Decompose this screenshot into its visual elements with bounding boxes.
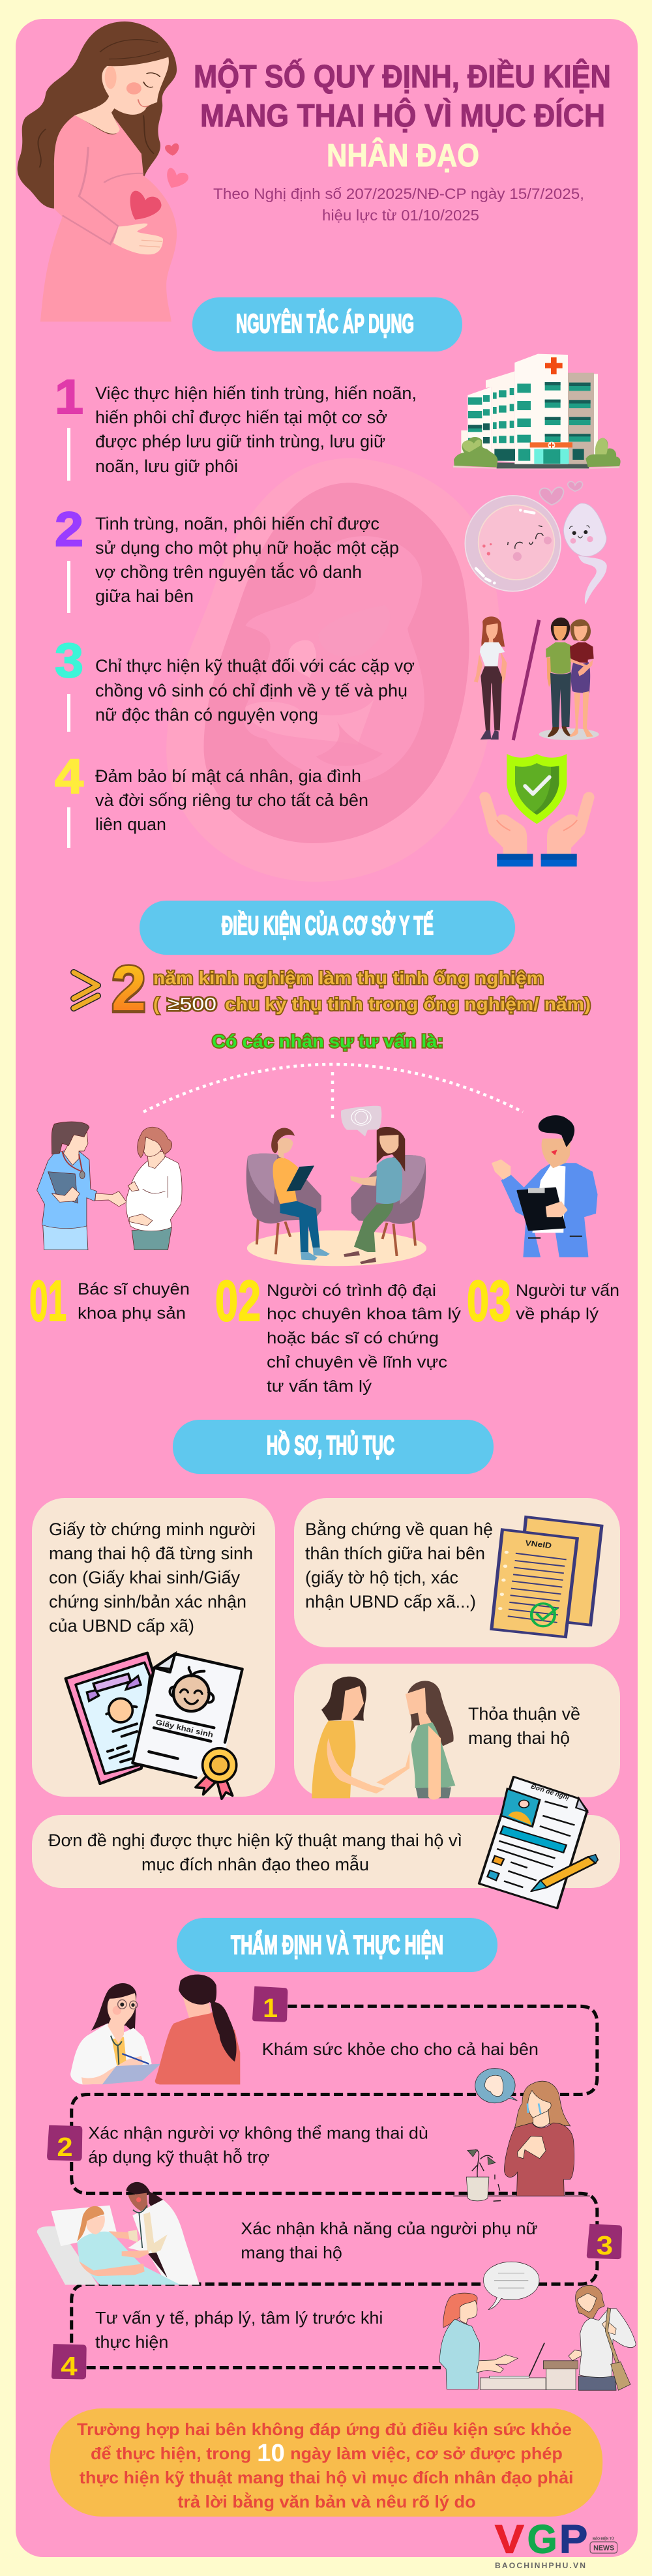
experience requirement: năm kinh nghiệm làm thụ tinh ống nghiệm: [153, 968, 544, 988]
principle 3: Chỉ thực hiện kỹ thuật đối với các cặp vợ: [95, 656, 415, 676]
callout: refusal within 10 working days: 10: [257, 2439, 285, 2467]
card: agreement: mang thai hộ: [468, 1728, 570, 1748]
principle 2: giữa hai bên: [95, 586, 194, 606]
card: application form: Đơn đề nghị được thực hiện kỹ thuật mang thai hộ vì: [48, 1831, 462, 1850]
step 4: thực hiện: [95, 2332, 168, 2352]
logo: VGP News: BAOCHINHPHU.VN: [495, 2561, 585, 2570]
callout: refusal within 10 working days: ngày làm việc, cơ sở được phép: [290, 2445, 563, 2463]
illustration: VNeID document: [492, 1517, 602, 1637]
principle 1: hiến phôi chỉ được hiến tại một cơ sở: [95, 408, 387, 427]
step 4: Tư vấn y tế, pháp lý, tâm lý trước khi: [95, 2308, 383, 2328]
principle 1: [55, 370, 417, 481]
step 1: Khám sức khỏe cho cho cả hai bên: [262, 2039, 539, 2059]
card: agreement: [294, 1664, 620, 1797]
callout: refusal within 10 working days: thực hiện kỹ thuật mang thai hộ vì mục đích nhân đạo phải: [80, 2469, 574, 2487]
icon: greater-or-equal sign: [74, 972, 98, 1008]
personnel 02: chỉ chuyên về lĩnh vực: [267, 1353, 447, 1371]
icon: large heart: [167, 168, 188, 188]
illustration: VNeID document: VNeID: [524, 1538, 552, 1550]
principle 4: [55, 749, 368, 848]
personnel 01: [29, 1268, 190, 1333]
personnel 03: [467, 1268, 619, 1333]
step 1: [252, 1986, 539, 2059]
principle 3: 3: [55, 633, 83, 687]
card: agreement: Thỏa thuận về: [468, 1704, 580, 1724]
logo: VGP News: [495, 2517, 617, 2570]
illustration: shield with hands: [479, 754, 595, 867]
principle 1: được phép lưu giữ tinh trùng, lưu giữ: [95, 432, 385, 451]
step 3: [241, 2219, 622, 2262]
subtitle: Theo Nghị định số 207/2025/NĐ-CP ngày 15/7/2025,: [213, 185, 584, 202]
logo: VGP News: V: [495, 2517, 524, 2561]
heading pill: dossier: [173, 1420, 494, 1474]
principle 1: 1: [55, 370, 83, 424]
logo: VGP News: G: [527, 2517, 557, 2561]
personnel 02: học chuyên khoa tâm lý: [267, 1305, 462, 1323]
card: proof of prior birth: con (Giấy khai sinh/Giấy: [49, 1568, 241, 1587]
illustration: pregnant mother: [18, 22, 188, 322]
experience requirement: ≥500: [168, 994, 216, 1014]
card: kinship proof: Bằng chứng về quan hệ: [305, 1520, 493, 1539]
step 2: [47, 2123, 428, 2167]
illustration: counselling session: [246, 1106, 426, 1266]
principle 3: [55, 633, 415, 732]
card: kinship proof: (giấy tờ hộ tịch, xác: [305, 1568, 458, 1587]
personnel 03: Người tư vấn: [516, 1281, 619, 1300]
illustration: hospital: [453, 354, 621, 469]
heading pill: appraisal: THẨM ĐỊNH VÀ THỰC HIỆN: [231, 1929, 443, 1960]
step 4: 4: [61, 2351, 78, 2381]
step 3: 3: [597, 2230, 613, 2260]
personnel 01: khoa phụ sản: [78, 1304, 186, 1323]
heading pill: facility conditions: ĐIỀU KIỆN CỦA CƠ SỞ Y TẾ: [222, 910, 434, 940]
principle 2: 2: [55, 502, 83, 556]
principle 2: Tinh trùng, noãn, phôi hiến chỉ được: [95, 514, 379, 533]
watermark: fetus in womb: [166, 458, 501, 882]
subtitle: [213, 185, 584, 224]
card: proof of prior birth: [32, 1498, 275, 1797]
heading pill: appraisal: [177, 1918, 497, 1972]
icon: small heart: [165, 143, 179, 156]
callout: refusal within 10 working days: trả lời bằng văn bản và nêu rõ lý do: [177, 2492, 476, 2511]
card: proof of prior birth: Giấy tờ chứng minh người: [49, 1520, 256, 1539]
dashed process path: [72, 2006, 597, 2368]
principle 4: 4: [55, 749, 83, 803]
form label: Đơn đề nghị: [529, 1782, 571, 1801]
heading pill: facility conditions: [140, 901, 515, 955]
illustration: doctor examining patient: [70, 1975, 240, 2084]
personnel 02: hoặc bác sĩ có chứng: [267, 1329, 439, 1347]
principle 2: [55, 502, 399, 613]
logo: VGP News: P: [559, 2517, 587, 2561]
illustration: doctor with patient in bed: [37, 2182, 200, 2285]
heading pill: dossier: HỒ SƠ, THỦ TỤC: [267, 1430, 394, 1460]
step 4: [52, 2308, 383, 2381]
personnel heading: Có các nhân sự tư vấn là:: [212, 1031, 443, 1051]
card: proof of prior birth: của UBND cấp xã): [49, 1616, 194, 1636]
principle 4: và đời sống riêng tư cho tất cả bên: [95, 790, 368, 810]
principle 3: chồng vô sinh có chỉ định về y tế và phụ: [95, 681, 408, 700]
principle 1: noãn, lưu giữ phôi: [95, 457, 238, 476]
dotted connector: [143, 1064, 523, 1121]
personnel 03: về pháp lý: [516, 1305, 599, 1323]
principle 1: Việc thực hiện hiến tinh trùng, hiến noãn,: [95, 383, 417, 403]
illustration: egg and sperm: [465, 481, 607, 605]
step 3: Xác nhận khả năng của người phụ nữ: [241, 2219, 538, 2238]
step 2: Xác nhận người vợ không thể mang thai dù: [88, 2123, 428, 2143]
divider slash: [512, 620, 541, 741]
logo: VGP News: BÁO ĐIỆN TỬ: [593, 2536, 615, 2541]
personnel 01: 01: [29, 1268, 67, 1333]
personnel 02: tư vấn tâm lý: [267, 1377, 372, 1396]
principle 2: vợ chồng trên nguyên tắc vô danh: [95, 562, 362, 582]
title: NHÂN ĐẠO: [327, 138, 479, 173]
card: kinship proof: thân thích giữa hai bên: [305, 1544, 485, 1563]
illustration: doctor and pregnant patient: [37, 1122, 182, 1250]
personnel 02: Người có trình độ đại: [267, 1281, 436, 1300]
callout: refusal within 10 working days: Trường hợp hai bên không đáp ứng đủ điều kiện sức khỏe: [77, 2421, 572, 2439]
principle 3: nữ độc thân có nguyện vọng: [95, 705, 318, 725]
step 2: 2: [57, 2132, 73, 2162]
illustration: crying woman with wilted plant: [453, 2069, 590, 2201]
personnel 02: 02: [215, 1268, 261, 1333]
experience requirement: [153, 968, 591, 1014]
icon: heart on belly: [130, 191, 162, 220]
principle 4: liên quan: [95, 815, 166, 834]
card: proof of prior birth: chứng sinh/bản xác nhận: [49, 1592, 246, 1611]
title: [194, 59, 611, 173]
principle 2: sử dụng cho một phụ nữ hoặc một cặp: [95, 538, 399, 558]
heading pill: principles: [192, 297, 462, 352]
big number 2: 2: [111, 953, 146, 1024]
certificate label: Giấy khai sinh: [155, 1718, 214, 1739]
card: kinship proof: nhận UBND cấp xã...): [305, 1592, 476, 1611]
personnel 01: Bác sĩ chuyên: [78, 1280, 190, 1298]
illustration: application form and pen: [479, 1776, 598, 1908]
couple: [539, 618, 599, 740]
card: application form: mục đích nhân đạo theo mẫu: [141, 1855, 369, 1874]
step 2: áp dụng kỹ thuật hỗ trợ: [88, 2148, 269, 2167]
illustration: two women shaking hands: [312, 1677, 455, 1800]
principle 4: Đảm bảo bí mật cá nhân, gia đình: [95, 766, 361, 786]
step 3: mang thai hộ: [241, 2243, 342, 2262]
logo: VGP News: NEWS: [593, 2545, 614, 2553]
card: kinship proof: [294, 1498, 620, 1647]
illustration: woman and couple: [474, 616, 599, 741]
card: proof of prior birth: mang thai hộ đã từng sinh: [49, 1544, 253, 1563]
illustration: birth certificates: [66, 1653, 243, 1799]
personnel 02: [215, 1268, 462, 1396]
illustration: reception desk consultation: [439, 2262, 636, 2390]
personnel 03: 03: [467, 1268, 511, 1333]
callout: refusal within 10 working days: để thực hiện, trong: [91, 2445, 251, 2463]
experience requirement: (: [153, 994, 160, 1014]
callout: refusal within 10 working days: [50, 2408, 602, 2517]
single woman: [474, 616, 507, 740]
experience requirement: chu kỳ thụ tinh trong ống nghiệm/ năm): [225, 994, 591, 1014]
illustration: legal adviser: [492, 1115, 598, 1257]
step 1: 1: [263, 1993, 278, 2023]
ribbon seal: [196, 1748, 237, 1799]
card: application form: [32, 1815, 620, 1888]
heading pill: principles: NGUYÊN TẮC ÁP DỤNG: [236, 308, 414, 338]
title: MỘT SỐ QUY ĐỊNH, ĐIỀU KIỆN: [194, 59, 611, 95]
title: MANG THAI HỘ VÌ MỤC ĐÍCH: [200, 98, 605, 134]
subtitle: hiệu lực từ 01/10/2025: [322, 207, 479, 224]
